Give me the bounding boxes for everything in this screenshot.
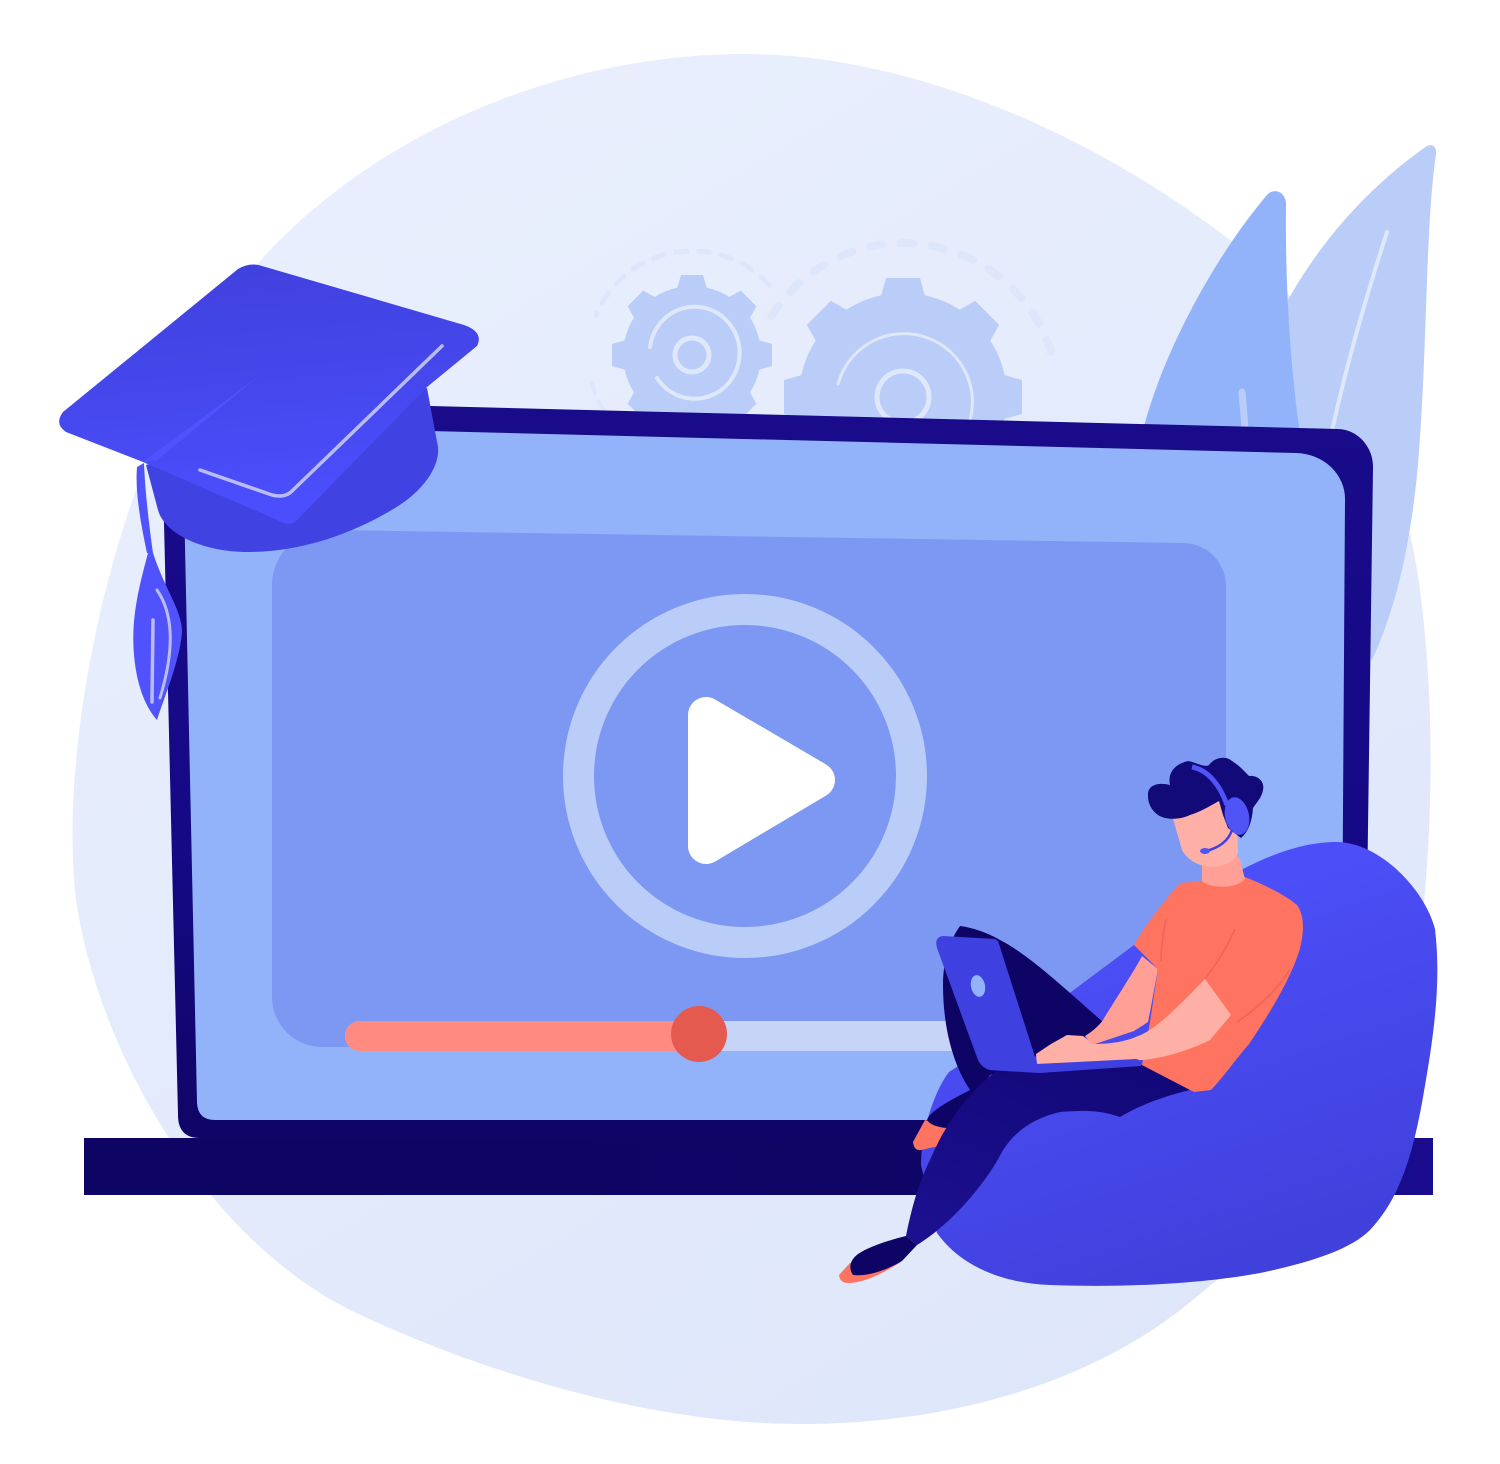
cap fold highlight <box>143 375 260 462</box>
play ring <box>578 610 912 942</box>
video panel <box>272 530 1226 1047</box>
front shoe sole <box>839 1262 901 1283</box>
headset <box>1192 767 1253 854</box>
gear: small <box>612 275 772 435</box>
front shoe <box>850 1236 917 1275</box>
cap tassel <box>133 553 182 720</box>
shirt <box>1134 877 1303 1092</box>
gears <box>592 243 1051 502</box>
play button <box>578 610 912 942</box>
front arm <box>1036 979 1231 1064</box>
beanbag <box>921 842 1437 1286</box>
video progress bar <box>345 1006 965 1062</box>
leaf: back <box>1280 145 1436 660</box>
rear leg <box>927 926 1103 1128</box>
rear shoe <box>913 1120 950 1150</box>
laptop screen <box>184 431 1345 1120</box>
play triangle <box>706 715 817 846</box>
progress knob <box>671 1006 727 1062</box>
cap board <box>59 265 479 524</box>
person <box>839 758 1303 1283</box>
dashed orbit: small gear <box>596 251 769 315</box>
microphone <box>1200 848 1210 854</box>
cap crown <box>146 388 438 552</box>
laptop screen frame <box>163 406 1373 1138</box>
progress filled <box>345 1021 690 1051</box>
progress track <box>345 1021 965 1051</box>
microphone arm <box>1206 830 1232 851</box>
dashed orbit: small gear lower <box>592 383 604 411</box>
tassel lines <box>157 590 170 698</box>
dashed orbit: large gear <box>768 243 1051 352</box>
laptop dot <box>969 974 987 998</box>
ear cup <box>1221 795 1253 837</box>
neck <box>1202 850 1245 887</box>
leaf: front <box>1143 191 1301 440</box>
headband <box>1192 767 1227 805</box>
cap tassel string <box>137 463 153 553</box>
face <box>1172 798 1238 867</box>
laptop base <box>990 1059 1141 1073</box>
front leg <box>906 1064 1190 1245</box>
gear: large <box>784 278 1022 502</box>
cap stitch line <box>200 346 442 496</box>
rear arm <box>1085 956 1158 1045</box>
shirt seams <box>1161 919 1290 1022</box>
laptop lid <box>936 936 1040 1073</box>
laptop base bar <box>84 1138 1433 1195</box>
graduation cap <box>59 265 479 720</box>
hair <box>1148 758 1263 838</box>
